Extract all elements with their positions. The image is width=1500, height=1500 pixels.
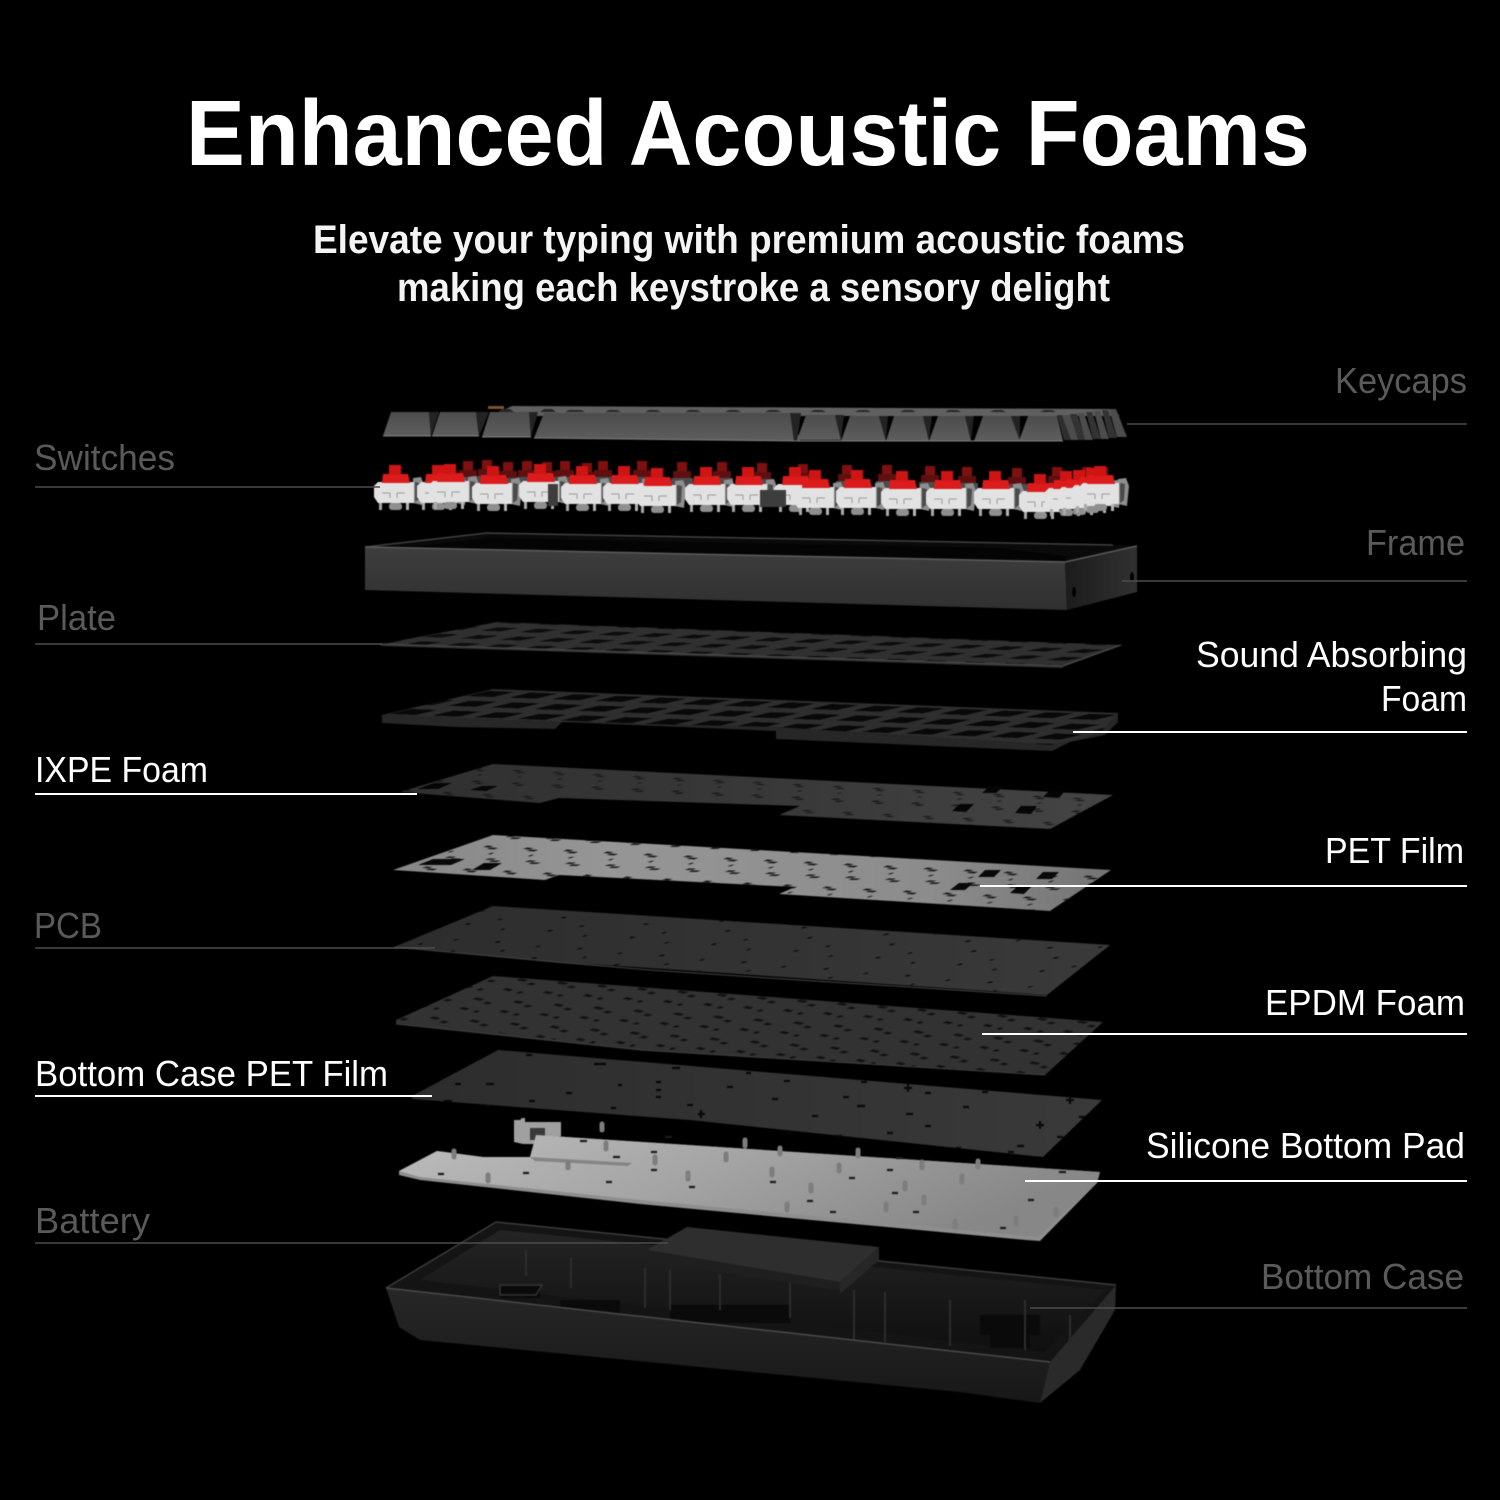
layer: EPDM foam	[396, 976, 1103, 1075]
label: Sound Absorbing Foam	[1073, 634, 1467, 732]
layer: frame	[365, 533, 1137, 610]
label: Sound Absorbing Foam: Sound Absorbing	[1196, 634, 1467, 675]
subtitle: Elevate your typing with premium acoustic foams	[313, 218, 1185, 262]
label: IXPE Foam: IXPE Foam	[35, 749, 208, 790]
label: Bottom Case: Bottom Case	[1261, 1256, 1464, 1297]
label: EPDM Foam: EPDM Foam	[1265, 982, 1465, 1023]
layer: plate	[381, 622, 1121, 668]
label: PET Film: PET Film	[1325, 830, 1464, 871]
layer: PET film	[393, 835, 1111, 911]
label: Plate: Plate	[37, 597, 116, 638]
title: Enhanced Acoustic Foams	[186, 81, 1310, 185]
label: Frame: Frame	[1366, 522, 1465, 563]
label: Switches: Switches	[34, 437, 175, 478]
subtitle	[313, 218, 1185, 310]
layer: switches	[374, 460, 1129, 519]
battery	[647, 1227, 879, 1294]
layer: IXPE foam	[400, 764, 1113, 829]
label: Sound Absorbing Foam: Foam	[1381, 678, 1467, 719]
layer: bottom case	[386, 1222, 1116, 1403]
layer: silicone bottom pad	[399, 1118, 1100, 1241]
label: PCB: PCB	[34, 905, 102, 946]
subtitle: making each keystroke a sensory delight	[397, 266, 1110, 310]
layer: sound absorbing foam	[382, 689, 1118, 751]
label: Battery: Battery	[35, 1200, 150, 1241]
layer: keycaps	[383, 406, 1127, 441]
layer: PCB	[394, 906, 1110, 996]
latch on the pad	[514, 1118, 561, 1144]
layer: bottom case PET film	[412, 1050, 1102, 1157]
label: Silicone Bottom Pad: Silicone Bottom Pad	[1146, 1125, 1465, 1166]
label: Bottom Case PET Film: Bottom Case PET Film	[35, 1053, 388, 1094]
label: Keycaps: Keycaps	[1335, 360, 1467, 401]
